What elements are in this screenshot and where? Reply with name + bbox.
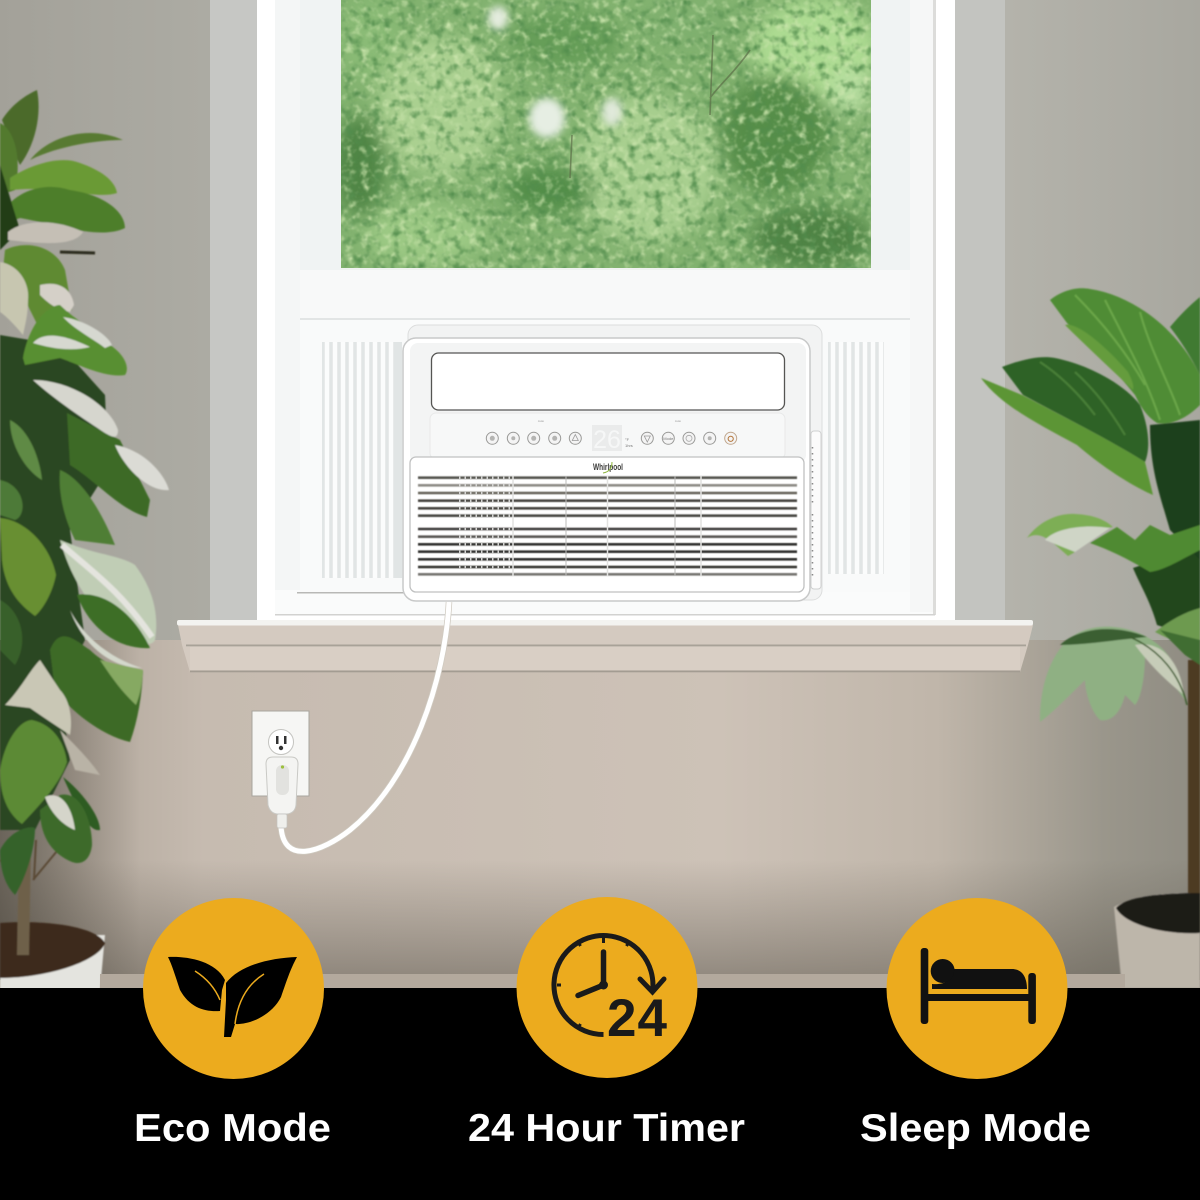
window sill — [177, 620, 1033, 672]
side panels — [297, 320, 910, 594]
control strip: 1hrs — [625, 443, 633, 448]
window view: trees — [334, 0, 877, 270]
air conditioner — [403, 325, 822, 601]
whirlpool logo: Whirlpool — [593, 462, 623, 472]
24 hour timer label: 24 Hour Timer — [468, 1107, 745, 1150]
left plant dark foliage — [0, 335, 108, 830]
24 hour timer badge — [516, 897, 698, 1078]
control strip: Auto — [675, 419, 681, 423]
icon: bed — [921, 948, 1036, 1024]
ac air vent window — [432, 353, 784, 410]
eco mode badge — [143, 898, 324, 1079]
control strip — [430, 413, 785, 459]
whirlpool logo — [593, 462, 623, 473]
sleep mode badge — [886, 898, 1068, 1079]
outlet — [252, 711, 309, 796]
icon: clock 24 — [554, 936, 668, 1048]
left plant — [0, 90, 169, 990]
louvers — [418, 478, 797, 574]
eco mode label: Eco Mode — [134, 1107, 331, 1150]
control strip: Auto — [538, 419, 544, 423]
left plant pot — [0, 922, 105, 990]
control strip: 26 — [593, 426, 621, 454]
right plant pot — [1114, 893, 1200, 988]
sleep mode label: Sleep Mode — [860, 1107, 1091, 1150]
control strip: Mode — [663, 436, 674, 441]
plug — [266, 757, 298, 828]
right plant — [981, 288, 1200, 988]
power cord — [281, 602, 449, 851]
window frame — [210, 0, 1005, 626]
icon: leaves — [168, 957, 297, 1037]
black footer band — [0, 988, 1200, 1200]
icon: clock 24: 24 — [607, 989, 668, 1048]
right plant trunk — [1188, 660, 1200, 900]
control strip: °F — [625, 437, 630, 442]
front grille — [410, 457, 804, 592]
baseboard — [100, 974, 1125, 989]
